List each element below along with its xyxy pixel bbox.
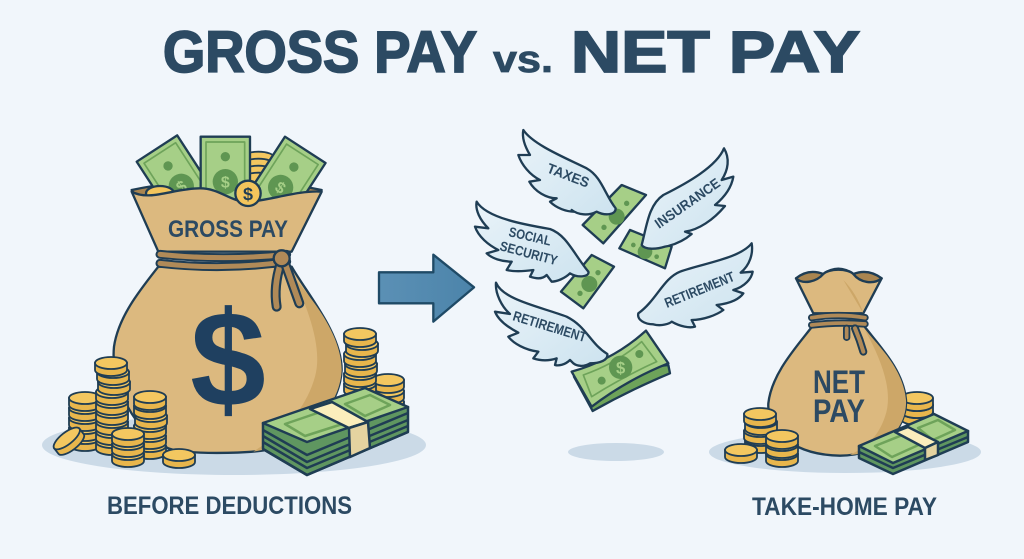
paper band bbox=[895, 427, 938, 448]
wing label: social: SOCIAL bbox=[507, 224, 553, 249]
flow arrow bbox=[379, 255, 474, 322]
bill: retirement large: $ bbox=[616, 358, 626, 377]
coin stacks right of gross bag bbox=[344, 328, 404, 415]
bag body bbox=[768, 325, 906, 456]
rope bbox=[812, 315, 865, 352]
label: gross pay on bag: GROSS PAY bbox=[168, 216, 288, 243]
caption: before deductions: BEFORE DEDUCTIONS bbox=[107, 492, 352, 520]
wing label: security: SECURITY bbox=[498, 238, 559, 268]
bag neck bbox=[796, 270, 882, 313]
gross pay money bag bbox=[114, 135, 342, 453]
banknote right bbox=[243, 137, 326, 227]
flying money group bbox=[475, 130, 753, 411]
coin with dollar sign: $ bbox=[243, 184, 253, 204]
stack tall bbox=[95, 357, 130, 455]
bill: retirement large bbox=[572, 331, 670, 411]
wing: retirement left bbox=[495, 283, 607, 366]
caption: take-home pay: TAKE-HOME PAY bbox=[752, 493, 937, 521]
bill: insurance bbox=[619, 230, 672, 268]
bill ornament bbox=[875, 420, 955, 457]
shadow: floating money bbox=[568, 443, 664, 461]
flat coin bbox=[163, 449, 195, 468]
bag neck bbox=[132, 188, 322, 252]
wing label: insurance: INSURANCE bbox=[652, 175, 723, 231]
title: GROSS PAY bbox=[163, 20, 477, 85]
shadow: net pay ground bbox=[709, 431, 981, 473]
wing: taxes bbox=[518, 130, 616, 214]
banknote middle: $ bbox=[221, 174, 230, 191]
banknote left bbox=[137, 135, 215, 220]
bill ornament bbox=[285, 395, 390, 436]
wing: retirement right bbox=[638, 243, 753, 327]
wing label: retirement right: RETIREMENT bbox=[662, 268, 737, 311]
coins inside bag bbox=[242, 152, 274, 192]
banknote middle bbox=[201, 137, 250, 203]
cash stack net bbox=[859, 414, 968, 474]
label: net: NET bbox=[813, 364, 865, 400]
wing: insurance bbox=[642, 148, 733, 249]
wing label: taxes: TAXES bbox=[545, 160, 592, 191]
coin with dollar sign bbox=[235, 181, 261, 206]
title: vs. bbox=[493, 39, 553, 81]
coin in bag left bbox=[146, 186, 174, 201]
wing: social security bbox=[475, 202, 588, 282]
stack back left bbox=[69, 392, 101, 451]
bag opening bbox=[796, 269, 882, 293]
bag body shading bbox=[850, 330, 906, 455]
bill: social security bbox=[561, 255, 614, 308]
stack front bbox=[112, 428, 144, 467]
title: NET PAY bbox=[571, 20, 860, 85]
stack right bbox=[134, 391, 167, 459]
wing label: retirement left: RETIREMENT bbox=[511, 308, 589, 345]
banknote right: $ bbox=[272, 179, 288, 198]
label: pay: PAY bbox=[813, 393, 865, 429]
bag body bbox=[114, 267, 342, 453]
bag opening bbox=[132, 180, 322, 203]
tilted coin bbox=[50, 424, 87, 459]
title bbox=[163, 20, 860, 85]
cash stack gross bbox=[263, 388, 408, 475]
paper band bbox=[310, 402, 368, 428]
shadow: gross pay ground bbox=[42, 415, 426, 475]
rope bbox=[160, 250, 299, 307]
coins behind bag right bbox=[901, 392, 933, 425]
big dollar sign: $ bbox=[190, 283, 266, 435]
net pay money bag bbox=[768, 269, 933, 456]
coin stacks left of gross bag bbox=[50, 357, 195, 468]
banknote left: $ bbox=[174, 178, 190, 197]
bill: taxes bbox=[583, 185, 646, 243]
coin stacks net bag bbox=[725, 408, 798, 467]
bag body shading bbox=[253, 277, 342, 452]
